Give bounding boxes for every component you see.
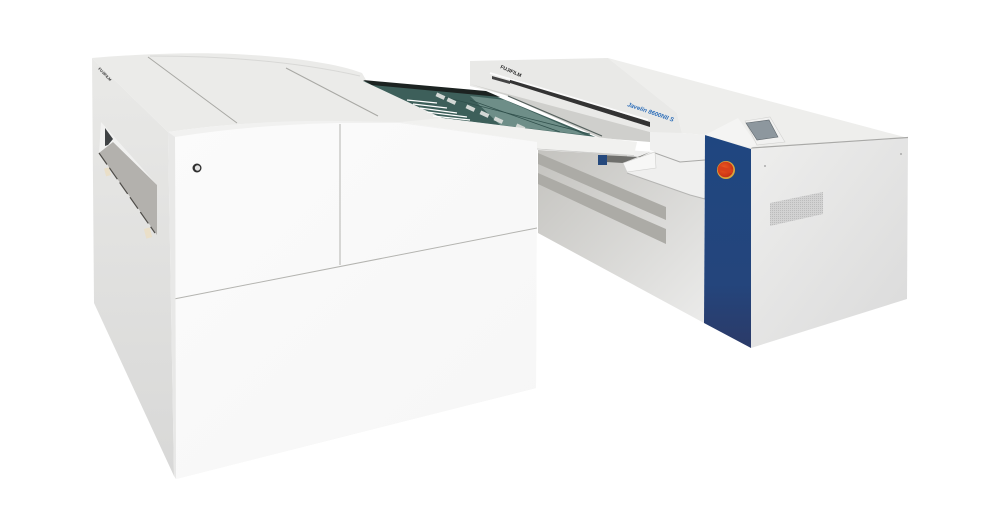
side panel — [92, 58, 174, 476]
side panel — [751, 138, 908, 348]
screws — [764, 153, 902, 167]
tray back rail — [470, 84, 650, 142]
vent grille — [770, 192, 823, 226]
top panel seams — [148, 56, 378, 123]
brand label: FUJIFILM: FUJIFILM — [499, 64, 522, 79]
corner edge — [168, 132, 176, 479]
icon: red emergency knob — [717, 161, 735, 179]
white tray shelf — [400, 118, 637, 155]
hood slot — [510, 78, 650, 127]
top surface — [608, 58, 908, 149]
top surface — [92, 53, 442, 132]
side feed slot — [99, 122, 157, 239]
tray rollers — [407, 100, 470, 120]
sloped hood — [470, 58, 682, 133]
plate transfer tray — [363, 80, 656, 172]
hood lower white panels — [627, 128, 705, 199]
brand label: side: FUJIFILM — [97, 67, 112, 82]
tray interior — [363, 81, 598, 138]
lower front panel with stripes — [538, 150, 704, 323]
tray support bracket — [598, 152, 656, 172]
icon: round lock — [192, 164, 202, 172]
front panel seams — [174, 124, 537, 299]
left machine: plate processor — [92, 53, 537, 479]
front upper and lower panels — [168, 121, 537, 479]
touch control panel — [705, 117, 785, 148]
right machine: exposure unit — [470, 58, 908, 348]
blue column — [704, 135, 751, 348]
model label: Javelin 8600NII S: Javelin 8600NII S — [626, 102, 674, 124]
